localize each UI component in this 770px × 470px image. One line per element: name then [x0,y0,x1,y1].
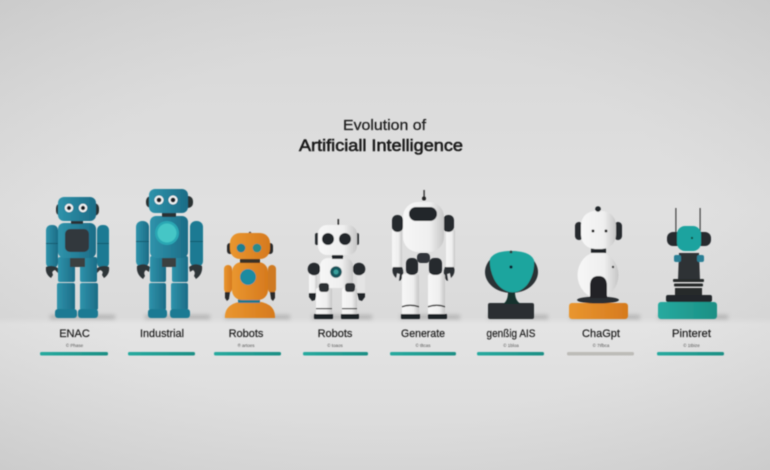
robot: genig AIS teal bowl on stand [485,251,538,319]
label: genig AIS [477,328,544,356]
robot: white and black Robots [308,219,365,319]
label: ENAC [40,328,108,356]
title: Evolution of [343,117,427,134]
label: ChaGpt: © 7Ifbca [593,342,610,348]
label: Pinteret: © 1tbize [683,342,700,348]
robot: Industrial teal humanoid [136,189,203,318]
robot: ENAC teal humanoid [46,197,109,318]
label: Generate: © tltcas [415,342,431,348]
label: Pinteret: Pinteret [672,328,711,340]
label: Generate: Generate [401,328,445,340]
robot: orange Robots [224,232,276,318]
label: Industrial: Industrial [140,328,184,340]
robot: Generate tall white [392,190,455,319]
label: Robots orange [214,328,281,356]
label: genig AIS: © 1bloa [503,342,519,348]
label: Robots white [303,328,368,356]
title [299,117,463,155]
label: ENAC: © Phase [66,342,84,348]
label: ENAC: ENAC [59,328,90,340]
label: ChaGpt [567,328,634,356]
title: Artificiall Intelligence [299,137,463,155]
robot: Pinteret teal on pedestal [658,208,717,319]
label: Pinteret [657,328,724,356]
robot: ChaGpt white on orange base [569,206,628,319]
label: ChaGpt: ChaGpt [582,328,620,340]
label: Robots orange: Robots [229,328,264,340]
label: Industrial [128,328,195,356]
label: Generate [390,328,456,356]
label: Robots white: © toaos [327,342,344,348]
label: Robots white: Robots [318,328,353,340]
label: genig AIS: genßig AIS [486,328,536,340]
label: Robots orange: ® artoes [237,342,255,348]
